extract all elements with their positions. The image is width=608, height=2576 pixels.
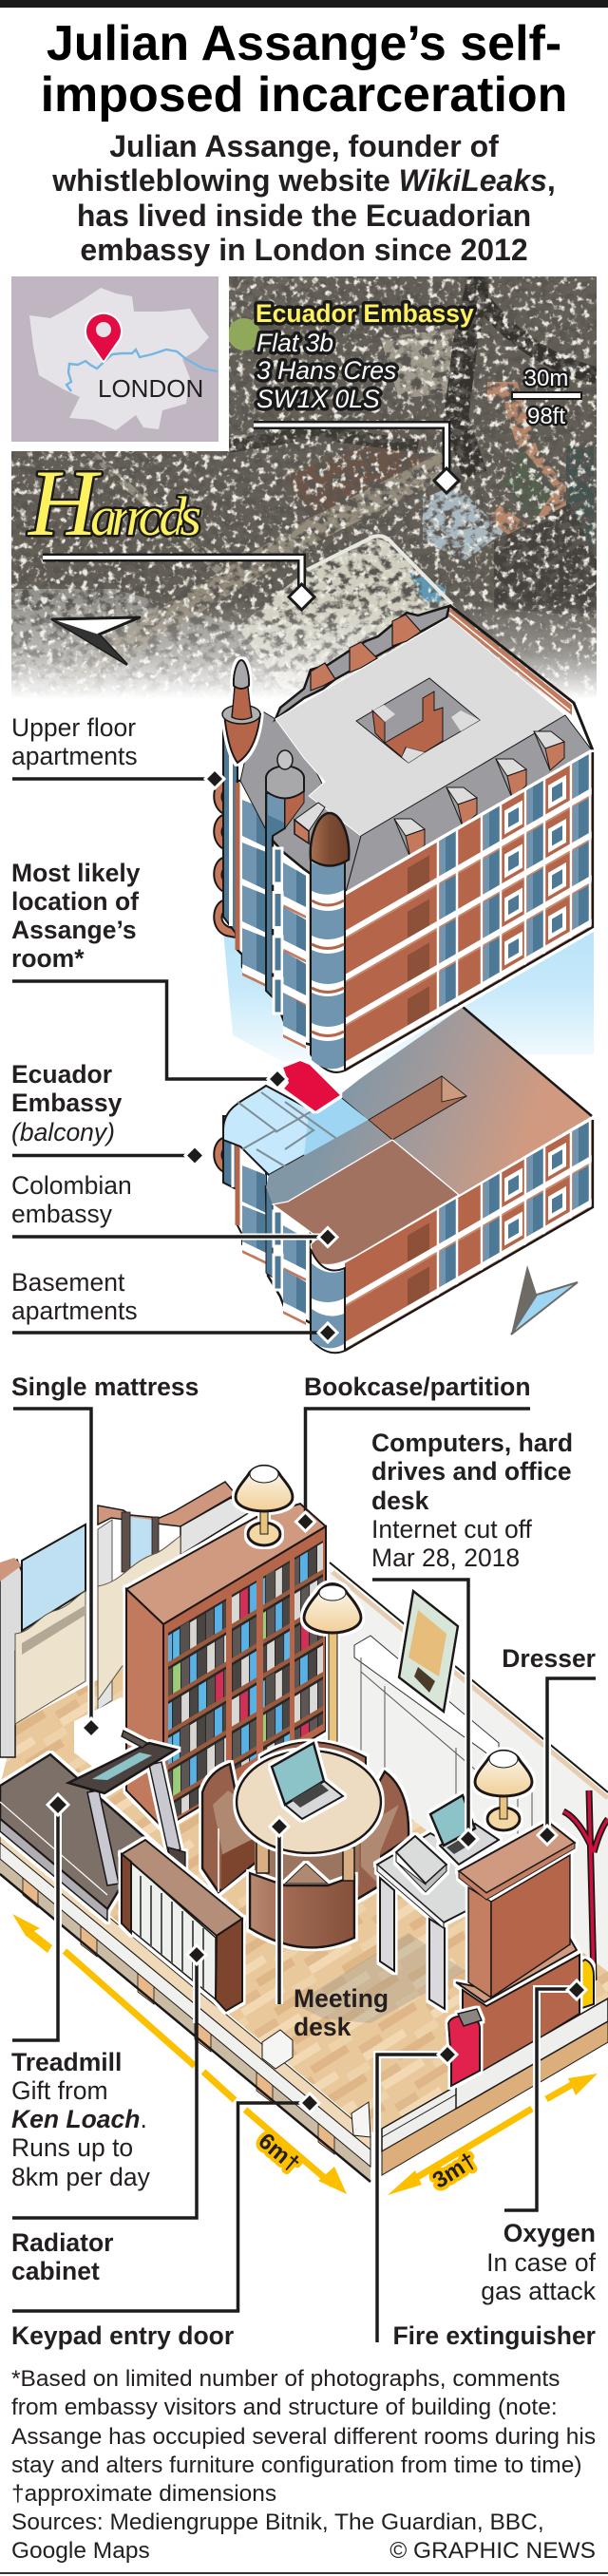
label: meeting desk	[294, 1984, 389, 2041]
label: upper floor apartments	[11, 713, 138, 770]
radiator cabinet	[122, 1840, 242, 2011]
leader: Ecuador Embassy	[254, 426, 459, 493]
footnotes and sources: Assange has occupied several different rooms during his	[11, 2424, 596, 2450]
leader: dresser	[538, 1678, 596, 1845]
far tower with rings	[214, 708, 238, 938]
subtitle: has lived inside the Ecuadorian	[77, 199, 531, 233]
office desk	[377, 1833, 484, 2009]
label: treadmill	[11, 2048, 151, 2191]
footnotes and sources: stay and alters furniture configuration from time to time)	[11, 2453, 582, 2478]
label: upper floor apartments: Upper floor	[11, 713, 136, 742]
Assange's room marker	[283, 1061, 340, 1111]
label: Colombian embassy: Colombian	[11, 1171, 132, 1200]
title	[41, 16, 567, 123]
label: most likely location: Assange’s	[11, 916, 137, 944]
title: Julian Assange’s self-	[47, 16, 561, 71]
Ecuador Embassy label: SW1X 0LS	[256, 385, 380, 413]
label: most likely location: location of	[11, 887, 139, 916]
front dormers	[394, 731, 564, 858]
Ecuador Embassy label: Ecuador Embassy	[256, 299, 474, 328]
leader: radiator cabinet	[12, 1945, 206, 2218]
front chair	[250, 1864, 354, 1947]
label: radiator cabinet	[11, 2228, 114, 2285]
room illustration	[0, 1466, 608, 2182]
leader: single mattress	[13, 1409, 101, 1737]
leader: treadmill	[12, 1794, 68, 2040]
scale bar: 30m	[524, 366, 568, 391]
lower front turret	[311, 1249, 345, 1353]
label: Colombian embassy: embassy	[11, 1200, 113, 1228]
label: computers, hard drives and office desk: desk	[371, 1487, 429, 1515]
blue glow between building levels	[223, 879, 594, 1078]
label: most likely location	[11, 859, 141, 973]
label: dresser: Dresser	[502, 1644, 596, 1673]
lower building: embassy floor and basement	[214, 1007, 593, 1353]
table legs	[256, 1840, 354, 1881]
footnotes and sources: Google Maps	[11, 2538, 150, 2564]
side wall section D	[273, 841, 311, 1049]
desk laptop	[430, 1795, 499, 1865]
mansard roof, left slopes	[240, 708, 361, 896]
floor shadow	[294, 1933, 466, 2023]
top black bar	[0, 0, 608, 8]
bottom rule	[0, 2572, 608, 2574]
second turret	[266, 750, 304, 997]
leader: Ecuador Embassy balcony	[12, 1146, 204, 1165]
left chair	[202, 1764, 256, 1892]
rear dormers	[276, 606, 449, 719]
computer drive box	[396, 1836, 446, 1892]
map pin	[86, 314, 121, 361]
map label: LONDON	[98, 374, 203, 403]
Colombian embassy floor plan	[273, 1140, 459, 1264]
locator map: London	[11, 276, 218, 442]
footnotes and sources: from embassy visitors and structure of building (note:	[11, 2395, 558, 2420]
right chair	[356, 1771, 408, 1900]
leader: bookcase/partition	[296, 1409, 530, 1531]
leader: Harrods	[43, 558, 314, 610]
label: oxygen: Oxygen	[504, 2219, 596, 2247]
aerial photograph	[11, 276, 597, 699]
north arrow, building	[0, 1265, 578, 1580]
label: basement apartments: Basement	[11, 1268, 125, 1297]
dimension arrow: 6m	[12, 1914, 347, 2194]
label: treadmill: 8km per day	[11, 2163, 151, 2191]
floor	[0, 1667, 608, 2132]
label: single mattress: Single mattress	[11, 1373, 199, 1401]
label: upper floor apartments: apartments	[11, 742, 138, 770]
label: radiator cabinet: Radiator	[11, 2228, 114, 2257]
label: Colombian embassy	[11, 1171, 132, 1228]
label: oxygen: gas attack	[481, 2277, 597, 2305]
label: Ecuador Embassy balcony	[11, 1060, 123, 1146]
title: imposed incarceration	[41, 67, 567, 123]
back chair	[261, 1742, 366, 1776]
label: radiator cabinet: cabinet	[11, 2257, 100, 2285]
back wall with panelling	[285, 1563, 608, 1979]
front mansard	[345, 715, 592, 896]
side wall section B	[238, 781, 266, 987]
label: bookcase/partition: Bookcase/partition	[304, 1373, 531, 1401]
label: computers, hard drives and office desk	[371, 1429, 573, 1572]
dimension arrow: 3m	[388, 2074, 598, 2195]
Ecuador Embassy label	[256, 299, 474, 413]
credit: © GRAPHIC NEWS	[390, 2538, 596, 2564]
subtitle: whistleblowing website WikiLeaks,	[51, 163, 556, 198]
label: computers, hard drives and office desk: Internet cut off	[371, 1515, 533, 1544]
left window wall	[0, 1482, 250, 1757]
Ecuador Embassy label: Flat 3b	[256, 329, 333, 357]
lower plan: brick upper level	[266, 1007, 592, 1204]
roof courtyard	[356, 678, 480, 763]
label: most likely location: Most likely	[11, 859, 141, 887]
dimension label: 3m: 3m†	[428, 2148, 481, 2194]
corner dormer	[294, 803, 325, 843]
label: basement apartments: apartments	[11, 1297, 138, 1325]
scale bar	[512, 366, 581, 429]
label: computers, hard drives and office desk: drives and office	[371, 1457, 572, 1486]
front turret	[311, 813, 349, 1072]
seat shadow under table	[255, 1843, 359, 1885]
leader: basement apartments	[12, 1323, 337, 1342]
upper facade	[345, 752, 593, 1070]
label: fire extinguisher: Fire extinguisher	[392, 2321, 596, 2350]
scale bar: 98ft	[527, 404, 565, 429]
dresser	[456, 1822, 580, 2075]
oxygen cylinder	[577, 1960, 594, 2010]
embassy balcony plan	[223, 1086, 369, 1178]
coat stand	[563, 1790, 608, 1980]
leader: meeting desk	[270, 1817, 289, 2004]
label: keypad entry door: Keypad entry door	[11, 2321, 234, 2350]
footnotes and sources: Sources: Mediengruppe Bitnik, The Guardian, BBC,	[11, 2510, 544, 2535]
Harrods logo: Harrods	[27, 450, 201, 556]
label: treadmill: Treadmill	[11, 2048, 122, 2076]
bookcase	[126, 1504, 326, 1828]
leader: upper floor apartments	[12, 769, 224, 788]
label: treadmill: Ken Loach.	[11, 2105, 147, 2133]
lower facade right	[345, 1120, 593, 1351]
footnotes and sources: *Based on limited number of photographs, comments	[11, 2366, 560, 2392]
fire extinguisher	[448, 2009, 482, 2086]
leader: fire extinguisher	[377, 2045, 457, 2342]
label: treadmill: Runs up to	[11, 2133, 133, 2162]
leader: keypad entry door	[12, 2093, 319, 2311]
laptop on table	[272, 1743, 343, 1819]
dimension label: 6m: 6m†	[254, 2129, 305, 2177]
river Thames	[66, 350, 218, 391]
leader: most likely location	[12, 981, 287, 1089]
Ecuador Embassy label: 3 Hans Cres	[256, 356, 396, 385]
subtitle: embassy in London since 2012	[80, 233, 528, 267]
roof parapet	[449, 605, 593, 750]
right rail over dresser	[456, 1998, 608, 2109]
label: basement apartments	[11, 1268, 138, 1325]
label: computers, hard drives and office desk: Computers, hard	[371, 1429, 573, 1457]
spire turret	[222, 660, 260, 763]
lamp on bookcase	[236, 1466, 293, 1545]
leader: oxygen	[504, 1980, 586, 2210]
label: oxygen	[481, 2219, 597, 2305]
label: Ecuador Embassy balcony: Ecuador	[11, 1060, 112, 1089]
desk lamp	[475, 1751, 532, 1830]
subtitle: Julian Assange, founder of	[109, 129, 499, 163]
treadmill	[0, 1731, 185, 1921]
front left rail	[0, 1827, 370, 2182]
lower side wall	[266, 1187, 311, 1325]
mattress	[74, 1697, 129, 1790]
label: treadmill: Gift from	[11, 2076, 108, 2105]
lower left tower	[214, 1116, 266, 1264]
label: Ecuador Embassy balcony: (balcony)	[11, 1118, 115, 1146]
front right rail	[382, 1998, 608, 2175]
poster	[399, 1591, 458, 1712]
label: meeting desk: desk	[294, 2013, 352, 2041]
meeting table	[237, 1751, 381, 1853]
roof flat	[276, 617, 565, 836]
label: Ecuador Embassy balcony: Embassy	[11, 1089, 123, 1117]
footnotes and sources	[11, 2366, 596, 2564]
label: meeting desk: Meeting	[294, 1984, 389, 2013]
label: oxygen: In case of	[486, 2248, 597, 2277]
footnotes and sources: †approximate dimensions	[11, 2481, 276, 2507]
floor lamp	[304, 1584, 361, 1748]
leader: computers	[372, 1580, 478, 1848]
label: computers, hard drives and office desk: Mar 28, 2018	[371, 1544, 520, 1572]
label: most likely location: room*	[11, 944, 85, 973]
leader: Colombian embassy	[12, 1227, 337, 1246]
upper building: upper floor apartments	[214, 605, 593, 1072]
subtitle	[51, 129, 556, 267]
north arrow on aerial	[0, 617, 140, 817]
